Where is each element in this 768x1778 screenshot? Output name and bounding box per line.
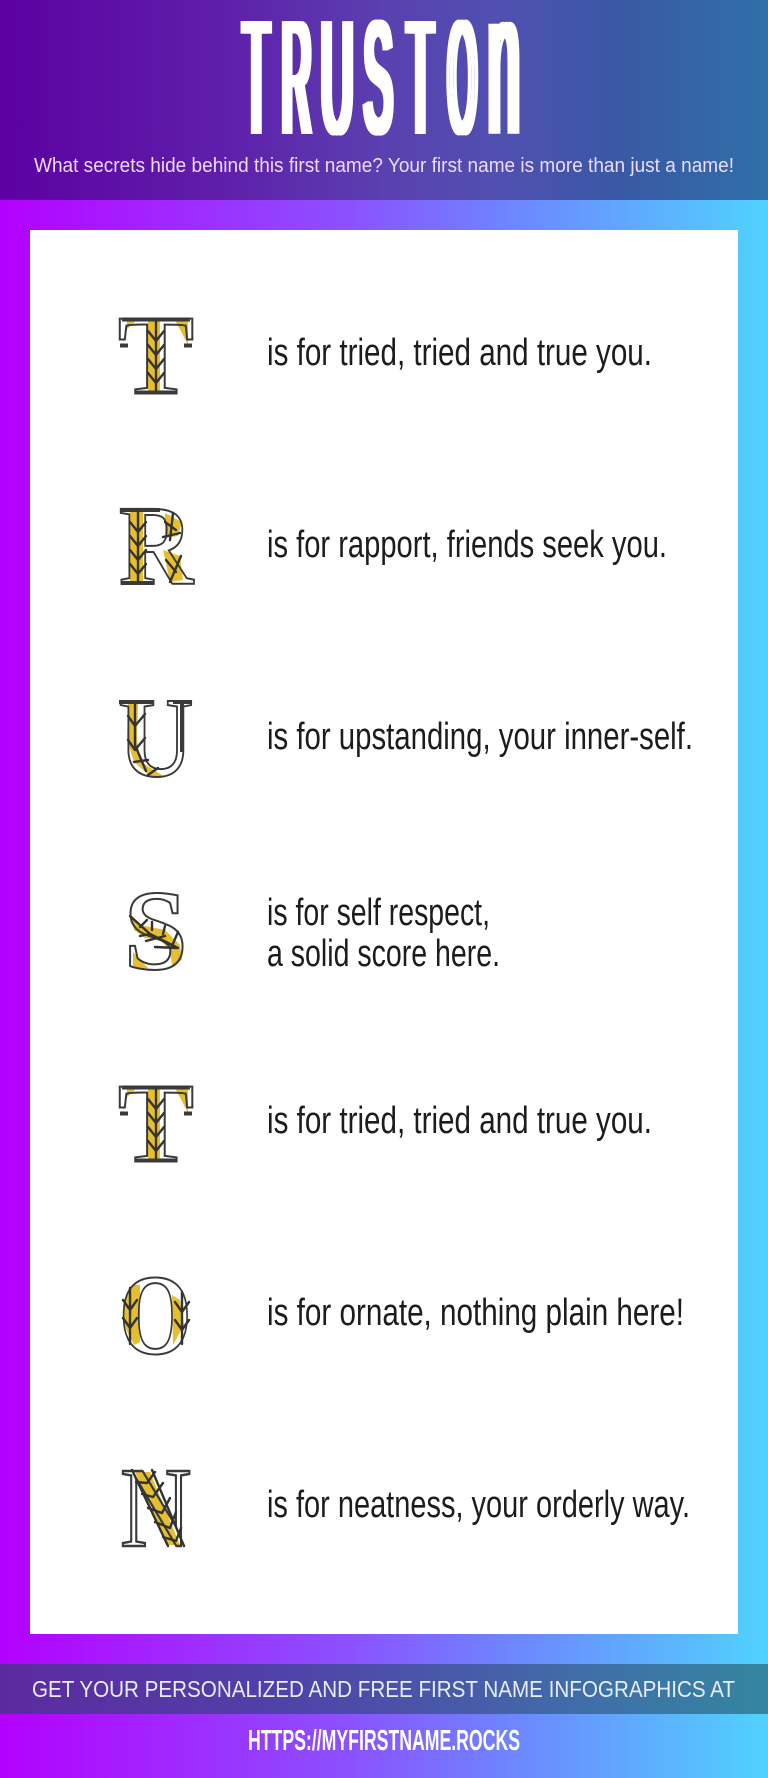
- subtitle: What secrets hide behind this first name? Your first name is more than just a name!: [34, 155, 734, 177]
- icon: letter S: S: [124, 867, 187, 994]
- icon: letter O: O: [119, 1252, 192, 1379]
- footer url: HTTPS://MYFIRSTNAME.ROCKS: [248, 1725, 520, 1757]
- row: O for ornate: [119, 1252, 684, 1379]
- icon: letter T: T: [118, 1060, 194, 1186]
- icon: letter R: R: [119, 483, 195, 609]
- icon: letter T: T: [118, 292, 194, 418]
- row: T for tried: [118, 292, 652, 418]
- row: U for upstanding: [118, 674, 693, 801]
- text line: is for tried, tried and true you.: [267, 332, 652, 374]
- row: T for tried: [118, 1060, 652, 1186]
- row: S for self respect: [124, 867, 500, 994]
- footer band: [0, 1664, 768, 1714]
- text lines: is for self respect,: [267, 892, 490, 934]
- text lines: a solid score here.: [267, 933, 500, 975]
- row: N for neatness: [120, 1446, 690, 1572]
- header band: [0, 0, 768, 200]
- row: R for rapport: [119, 483, 667, 609]
- white content panel: [30, 230, 738, 1634]
- icon: letter U: U: [118, 674, 194, 801]
- icon: letter N: N: [120, 1446, 192, 1572]
- text line: is for tried, tried and true you.: [267, 1100, 652, 1142]
- title: name: [240, 0, 520, 178]
